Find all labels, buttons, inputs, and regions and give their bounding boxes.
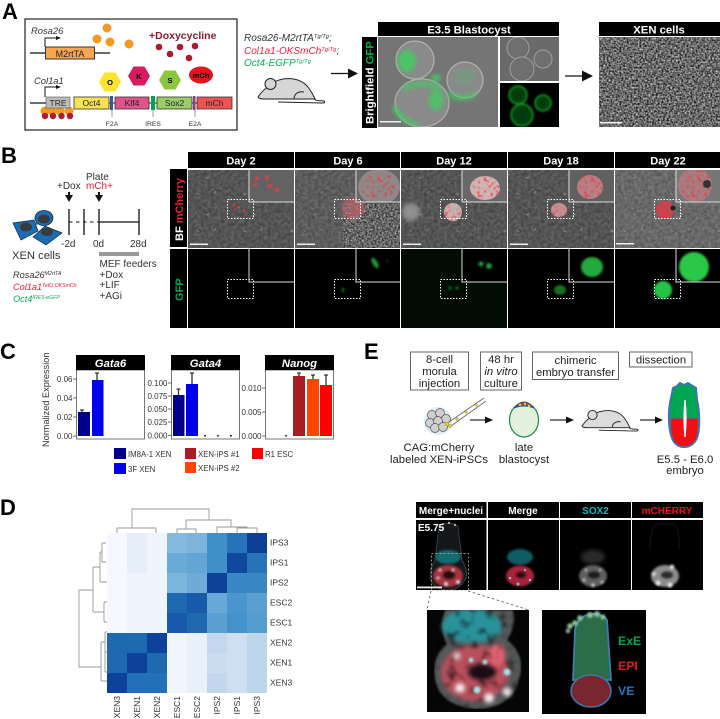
bar chart: Nanog: Nanog [282, 358, 317, 370]
channel header: SOX2: SOX2 [582, 506, 609, 517]
step box: embryo transfer [532, 352, 618, 380]
row labels: XEN1 [270, 658, 292, 668]
column: Day 12 [401, 152, 507, 328]
transgene schematic box: O [107, 78, 113, 87]
column labels: IPS2 [212, 696, 222, 714]
legend: IM8A-1 XEN [128, 450, 171, 459]
bar chart: Gata6: 0.06 [57, 375, 73, 384]
icon: XEN cells [13, 210, 62, 245]
transgene schematic box: Rosa26 [31, 25, 64, 36]
timeline: MEF feeders [100, 259, 157, 270]
bar chart: Gata6: 0.02 [57, 413, 73, 422]
row labels: IPS2 [270, 578, 289, 588]
legend [114, 448, 294, 474]
column labels: IPS3 [252, 696, 262, 714]
row labels: ESC1 [270, 618, 292, 628]
bar chart: Gata6: Gata6 [95, 358, 127, 370]
step captions: late [515, 442, 533, 454]
XEN cells image panel: XEN cells [633, 24, 685, 36]
bar chart: Gata4 [147, 355, 240, 440]
top dendrogram [117, 509, 257, 533]
column: Day 2 [188, 152, 294, 328]
column: Day 22 [615, 152, 720, 328]
timeline: 28d [130, 239, 147, 250]
transgene schematic box: Oct4 [83, 98, 101, 108]
icon: mouse [258, 78, 325, 103]
bar chart: Gata6 [57, 355, 145, 441]
step box: culture: culture [484, 378, 518, 390]
XEN cells image panel [599, 22, 720, 127]
bar chart: Gata4: 0.050 [147, 405, 168, 414]
step captions: embryo [666, 465, 704, 477]
transgene schematic box: S [167, 76, 173, 85]
icon: mouse [582, 410, 638, 431]
genotype text [244, 33, 339, 69]
timeline [57, 172, 157, 302]
step captions: labeled XEN-iPSCs [390, 454, 488, 466]
timeline: 0d [93, 239, 104, 250]
panel E: chimera workflow [364, 339, 713, 477]
panel letter C: C [0, 339, 16, 364]
panel: embryo immunofluorescence images [416, 502, 703, 714]
row labels [270, 538, 292, 688]
transgene schematic box: IRES [145, 121, 161, 128]
bar chart: Nanog [241, 355, 334, 441]
legend: XEN-iPS #2 [198, 464, 240, 473]
image: annotated embryo schematic [542, 610, 646, 714]
column labels: ESC2 [192, 696, 202, 718]
step box: dissection [630, 352, 692, 367]
step box: dissection: dissection [636, 354, 686, 366]
E3.5 blastocyst image panel: E3.5 Blastocyst [427, 24, 511, 36]
heatmap [107, 533, 267, 693]
genotype text: M2rtTA [45, 271, 62, 277]
channel header: Merge [488, 502, 559, 518]
step captions: E5.5 - E6.0 [657, 454, 713, 466]
genotype text: Oct4 [13, 294, 32, 304]
panel C: expression bar charts [0, 339, 334, 474]
column labels: ESC1 [172, 696, 182, 718]
image: annotated embryo schematic: VE [618, 684, 634, 698]
bar chart: Nanog: 0.000 [241, 432, 262, 441]
column labels: XEN2 [152, 696, 162, 718]
step box: morula injection: injection [419, 378, 460, 390]
row labels: IPS3 [270, 538, 289, 548]
bar chart: Gata4: 0.025 [147, 418, 168, 427]
column: Day 12: Day 12 [436, 156, 472, 168]
column: Day 18 [508, 152, 614, 328]
row labels: GFP [174, 278, 186, 301]
step box: embryo transfer: chimeric [554, 355, 597, 367]
column labels [112, 696, 262, 718]
bar chart: Gata6: 0.04 [57, 394, 73, 403]
panel letter E: E [364, 339, 379, 364]
arrow [565, 70, 593, 82]
channel header: mCHERRY: mCHERRY [642, 506, 693, 517]
panel B: reprogramming timeline and time course imaging [1, 143, 720, 328]
step box: morula injection [410, 352, 468, 390]
channel header: SOX2 [560, 502, 631, 518]
genotype text: TetO:OKSmCh [42, 283, 77, 289]
genotype text: ; [329, 33, 332, 44]
transgene schematic box: F2A [106, 121, 119, 128]
arrow [470, 416, 493, 424]
transgene schematic box: K [136, 72, 142, 81]
bar chart: Gata6: 0.00 [57, 432, 73, 441]
genotype text: Col1a1 [13, 282, 42, 292]
timeline: mCh+ [86, 181, 113, 192]
column labels: XEN3 [112, 696, 122, 718]
bar chart: Nanog: 0.005 [241, 408, 262, 417]
step captions: CAG:mCherry [404, 442, 475, 454]
column: Day 2: Day 2 [226, 156, 256, 168]
step box: culture: 48 hr [488, 354, 514, 366]
legend: R1 ESC [265, 450, 294, 459]
timeline: +AGi [100, 291, 122, 302]
panel A: reprogramming construct and blastocyst derivation [2, 0, 720, 130]
genotype text: Rosa26 [13, 270, 45, 280]
genotype text: Tg/Tg [314, 34, 330, 40]
bar chart: Nanog: 0.010 [241, 384, 262, 393]
genotype text: Tg/Tg [321, 47, 337, 53]
transgene schematic box [25, 19, 237, 130]
image: annotated embryo schematic: ExE [618, 634, 641, 648]
E3.5 blastocyst image panel [362, 22, 559, 128]
transgene schematic box: M2rtTA [56, 49, 84, 59]
panel letter B: B [1, 143, 17, 168]
step box: morula injection: morula [422, 366, 457, 378]
step captions [390, 442, 713, 477]
image: merge with nuclei: E5.75 [418, 523, 445, 534]
image: annotated embryo schematic: EPI [618, 659, 638, 673]
arrow [640, 416, 663, 424]
column: Day 6: Day 6 [333, 156, 363, 168]
transgene schematic box: Sox2 [165, 98, 184, 108]
genotype text: Col1a1-OKSmCh [244, 46, 321, 57]
panel letter D: D [0, 495, 16, 520]
bar chart: Gata4: 0.000 [147, 432, 168, 440]
bar chart: Gata4: Gata4 [190, 358, 222, 370]
icon: morula with injection pipette [424, 398, 486, 435]
column: Day 18: Day 18 [543, 156, 579, 168]
transgene schematic box: TRE [50, 98, 67, 108]
timeline: +LIF [100, 280, 120, 291]
column: Day 22: Day 22 [650, 156, 686, 168]
bar chart: Gata4: 0.075 [147, 392, 168, 401]
step box: embryo transfer: embryo transfer [536, 367, 615, 379]
step captions: blastocyst [499, 454, 550, 466]
image: zoomed embryo [427, 610, 529, 712]
image: merge [488, 520, 559, 590]
image: merge with nuclei [416, 520, 486, 590]
column labels: IPS1 [232, 696, 242, 714]
image: mCHERRY channel [632, 520, 703, 590]
E3.5 blastocyst image panel: Brightfield GFP [364, 41, 376, 124]
genotype text [13, 270, 77, 304]
arrow [550, 416, 574, 424]
legend: XEN-iPS #1 [198, 450, 240, 459]
timeline: -2d [61, 239, 75, 250]
timeline: Plate [86, 172, 109, 183]
arrow [331, 68, 358, 78]
timeline: +Dox [100, 270, 123, 281]
panel D: correlation heatmap with dendrograms [0, 495, 292, 718]
left dendrogram [79, 543, 107, 681]
column: Day 6 [295, 152, 400, 328]
row labels: IPS1 [270, 558, 289, 568]
transgene schematic box: mCh [193, 71, 210, 80]
legend: 3F XEN [128, 465, 155, 474]
row labels: BF mCherry [174, 177, 186, 241]
bar chart: Gata4: 0.100 [147, 379, 168, 388]
row labels [170, 169, 187, 328]
genotype text: Tg/Tg [296, 59, 312, 65]
transgene schematic box: Col1a1 [34, 75, 64, 86]
row labels: ESC2 [270, 598, 292, 608]
transgene schematic box: mCh [206, 98, 224, 108]
step box: morula injection: 8-cell [426, 354, 453, 366]
row labels: XEN2 [270, 638, 292, 648]
transgene schematic box: E2A [189, 121, 202, 128]
XEN cells label: XEN cells [12, 250, 61, 262]
icon: chimeric embryo [669, 383, 699, 447]
channel header: Merge: Merge [508, 506, 538, 517]
channel header: Merge+nuclei [416, 502, 486, 518]
step box: culture [480, 352, 522, 390]
transgene schematic box: +Doxycycline [149, 30, 217, 42]
channel header: Merge+nuclei: Merge+nuclei [419, 506, 483, 517]
genotype text: IRES-eGFP [32, 295, 60, 301]
transgene schematic box: Klf4 [125, 98, 140, 108]
genotype text: ; [336, 46, 339, 57]
step box: culture: in vitro [484, 366, 518, 378]
genotype text: Rosa26-M2rtTA [244, 33, 314, 44]
row labels: XEN3 [270, 678, 292, 688]
y axis label: Normalized Expression [41, 353, 51, 447]
column labels: XEN1 [132, 696, 142, 718]
genotype text: Oct4-EGFP [244, 58, 296, 69]
icon: late blastocyst [510, 402, 538, 437]
image: SOX2 channel [560, 520, 631, 590]
timeline: +Dox [57, 181, 81, 192]
channel header: mCHERRY [632, 502, 703, 518]
zoom guide lines [427, 591, 529, 610]
